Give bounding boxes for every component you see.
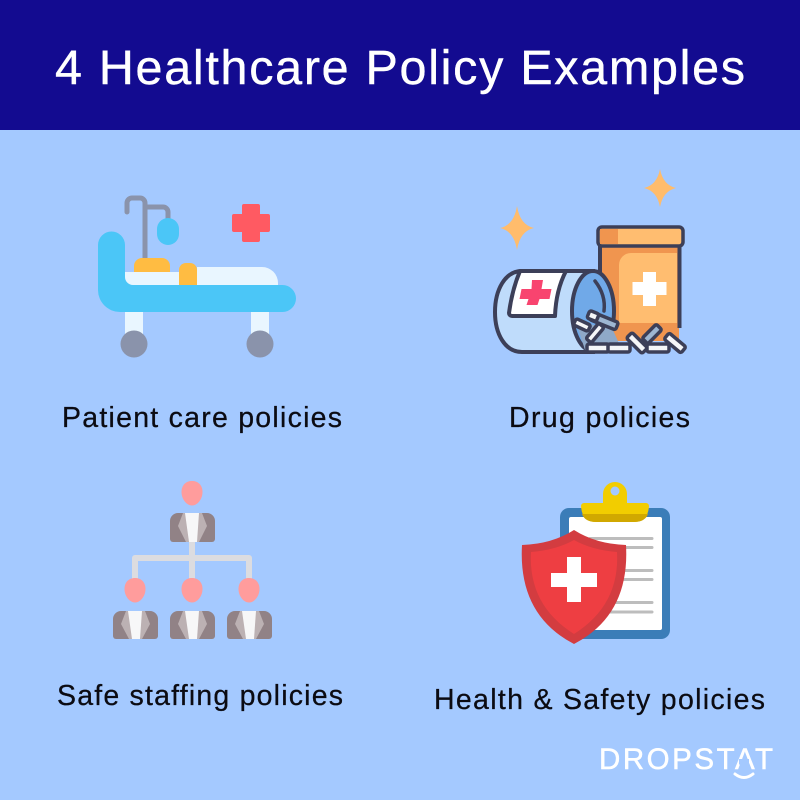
logo: dropstat: DROPSTAT xyxy=(599,743,773,776)
person: right staff xyxy=(227,578,272,639)
pills xyxy=(573,310,686,354)
label: patient care policies: Patient care policies xyxy=(62,402,342,434)
person: top manager xyxy=(170,481,215,542)
icon: medicine bottles xyxy=(495,169,686,354)
label: health and safety policies: Health & Safety policies xyxy=(434,684,765,716)
label: safe staffing policies: Safe staffing policies xyxy=(57,680,343,712)
title banner xyxy=(0,0,800,130)
icon: staff hierarchy xyxy=(113,481,272,639)
icon: hospital bed xyxy=(98,198,296,358)
person: middle staff xyxy=(170,578,215,639)
icon: clipboard and shield xyxy=(522,482,670,644)
title banner: 4 Healthcare Policy Examples xyxy=(55,41,745,95)
label: drug policies: Drug policies xyxy=(509,402,690,434)
person: left staff xyxy=(113,578,158,639)
